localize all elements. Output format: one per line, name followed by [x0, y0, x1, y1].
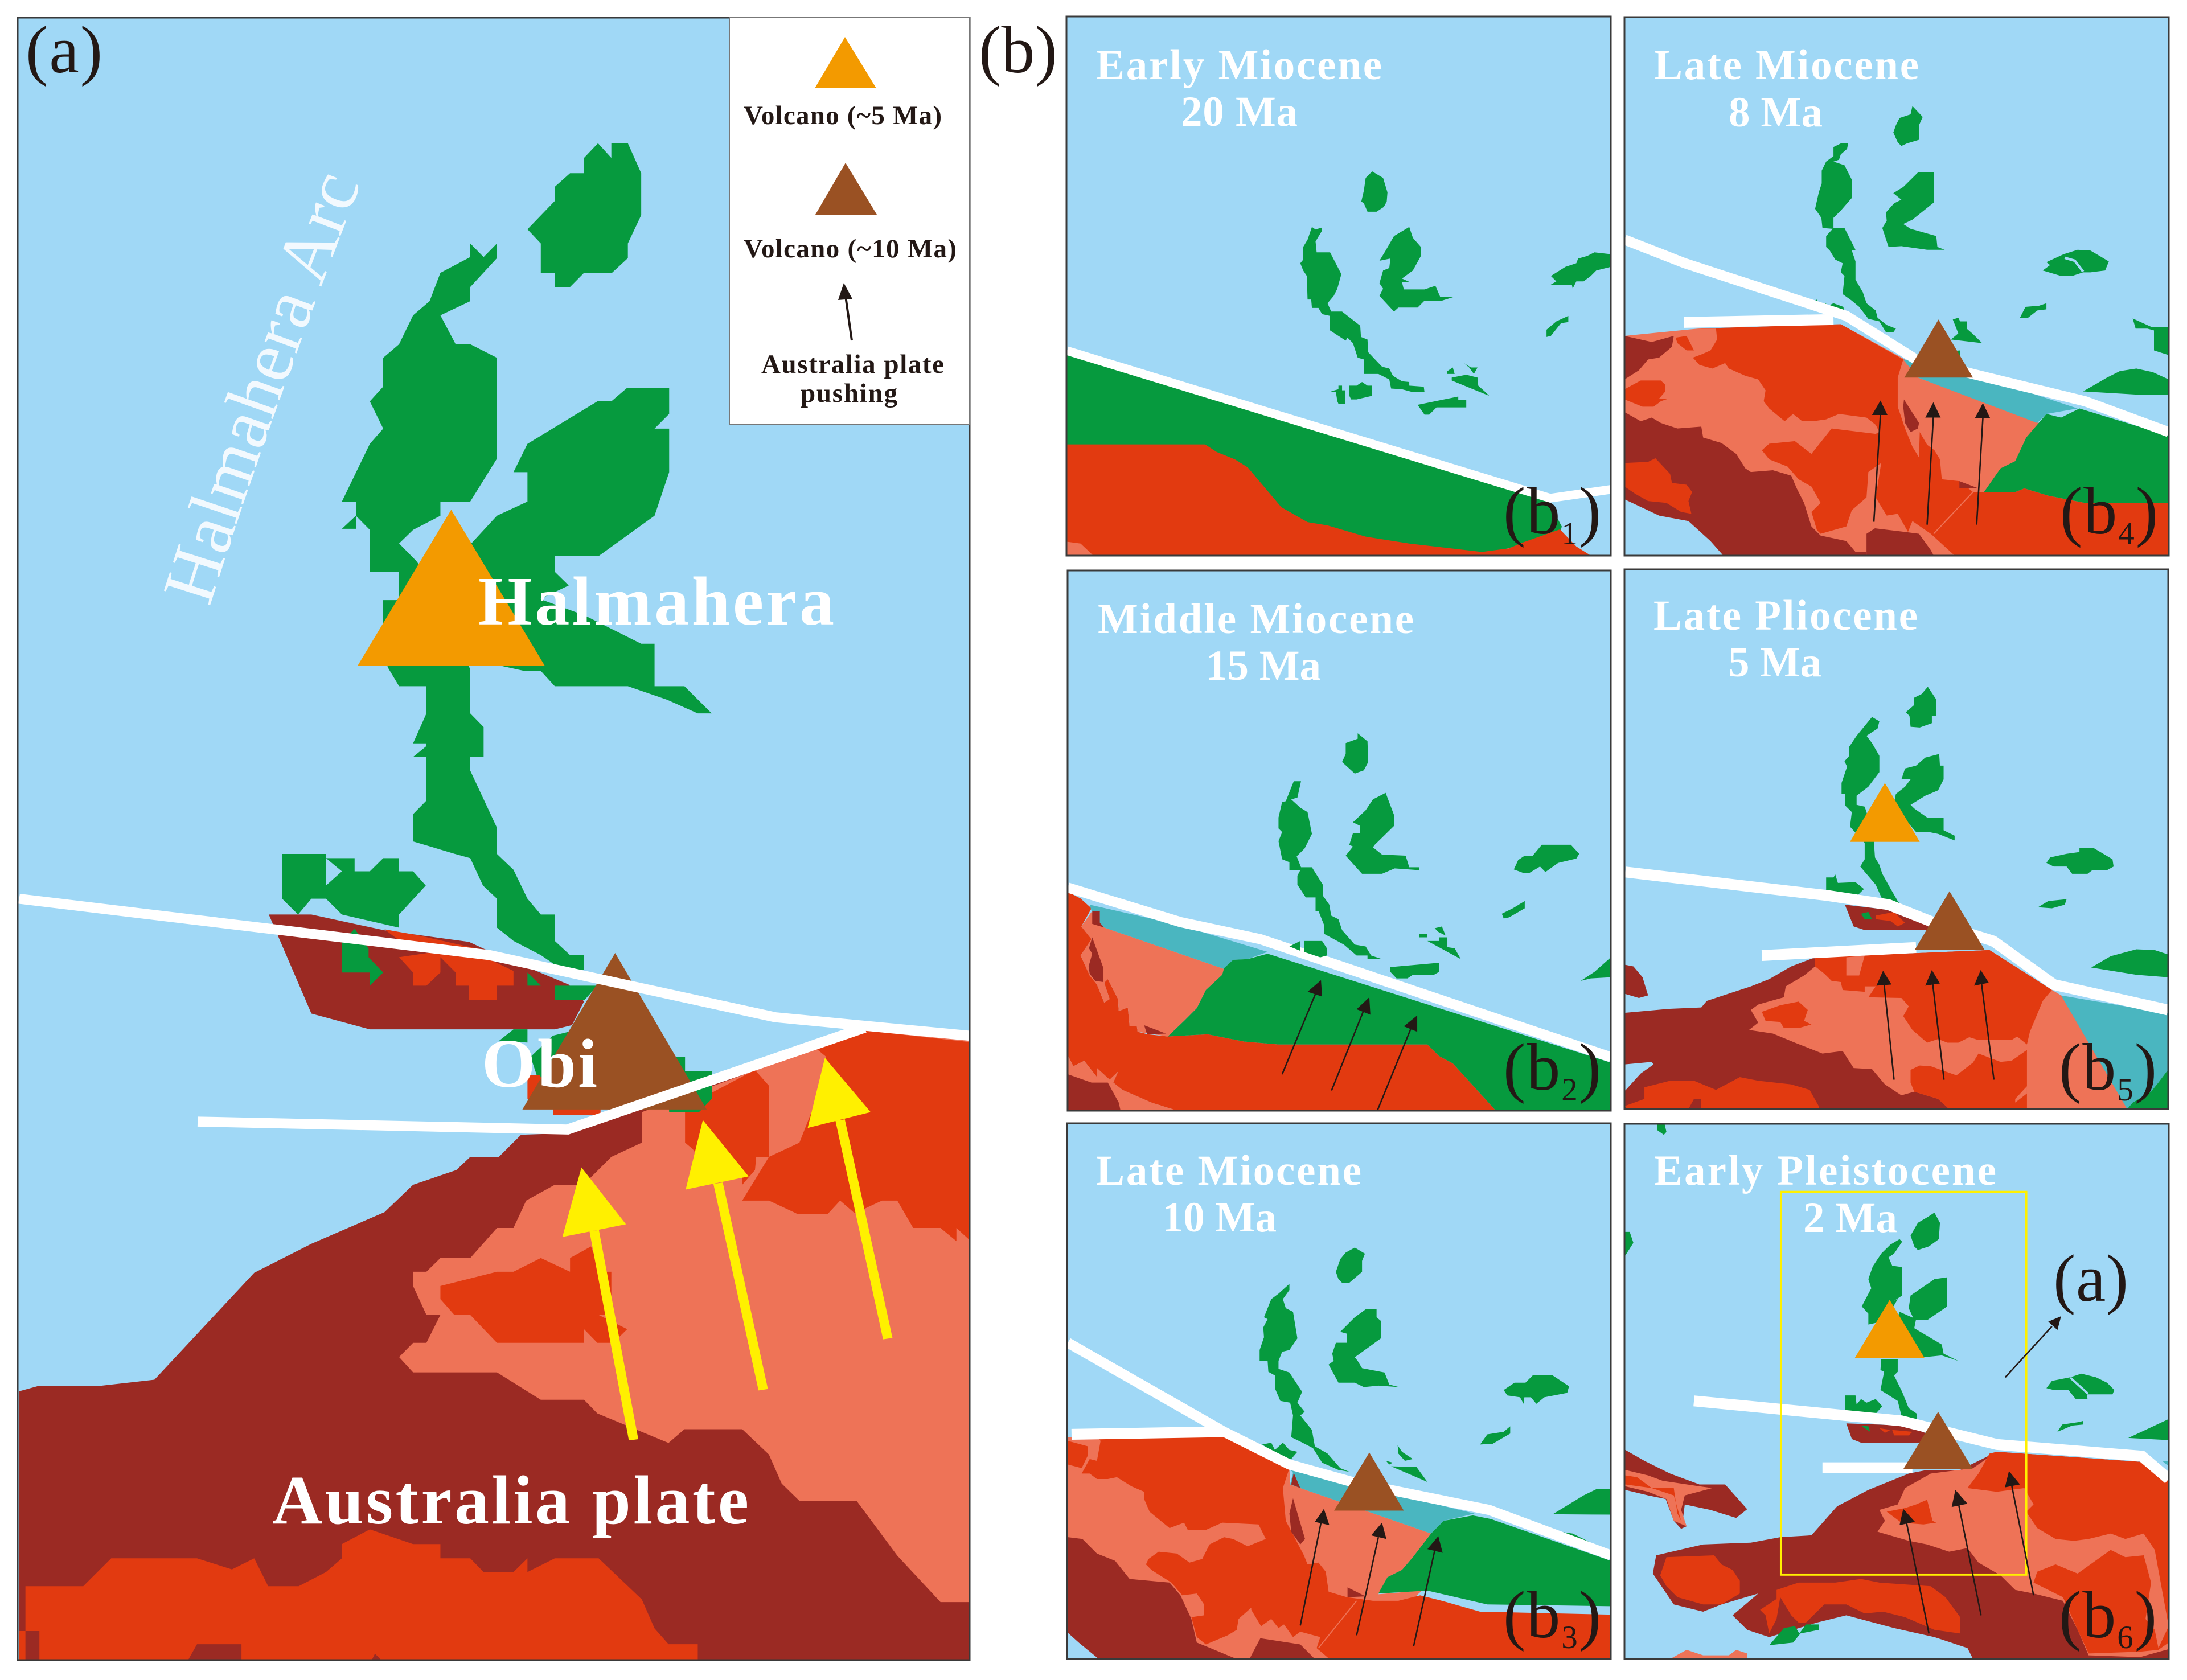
icon: orange volcano: [1855, 1300, 1925, 1358]
heading b1 age: 20 Ma: [1181, 88, 1298, 135]
arrow: to panel a: [2005, 1316, 2061, 1377]
label b3: (b: [1503, 1578, 1560, 1652]
map: b2: [1068, 570, 1611, 1111]
icon: orange volcano: [1850, 783, 1920, 842]
legend text: volcano 10 Ma: Volcano (~10 Ma): [744, 234, 957, 264]
arrow: yellow push 2: [686, 1120, 763, 1390]
label b2: 2: [1561, 1072, 1578, 1108]
trench line: upper: [19, 899, 969, 1036]
label: (a): (a): [26, 13, 102, 87]
label b6: 6: [2117, 1620, 2133, 1656]
label b3: ): [1579, 1578, 1601, 1652]
frame b1: [1066, 17, 1611, 556]
icon: brown volcano on Obi: [522, 953, 707, 1110]
trench line: lower: [198, 1028, 864, 1129]
frame b5: [1624, 569, 2168, 1109]
frame b2: [1068, 570, 1611, 1111]
label b3: 3: [1561, 1620, 1578, 1656]
heading b4: Late Miocene: [1654, 42, 1919, 89]
legend icon: brown volcano: [815, 163, 877, 215]
map: b3: [1067, 1123, 1611, 1659]
label b4: ): [2136, 474, 2158, 548]
icon: brown volcano: [1915, 892, 1985, 950]
heading b6: Early Pleistocene: [1654, 1147, 1996, 1194]
map: b1: [1066, 17, 1611, 556]
heading b4 age: 8 Ma: [1729, 89, 1823, 136]
heading b3 age: 10 Ma: [1162, 1194, 1277, 1241]
panel: b6 Early Pleistocene: [1624, 1124, 2169, 1659]
heading b3: Late Miocene: [1096, 1147, 1361, 1194]
label b2: (b: [1503, 1030, 1560, 1104]
legend text: Australia plate: Australia plate: [761, 350, 944, 379]
arrow: yellow push 1: [563, 1168, 634, 1440]
arrows: plate push: [1899, 1471, 2034, 1633]
panel: b4 Late Miocene 8 Ma: [1624, 17, 2169, 556]
label: Halmahera: Halmahera: [478, 563, 834, 640]
label b5: ): [2135, 1030, 2157, 1104]
label b4: (b: [2060, 474, 2117, 548]
arrows: plate push: [1872, 400, 1990, 525]
label b4: 4: [2118, 516, 2135, 552]
panel: b5 Late Pliocene: [1624, 569, 2168, 1109]
label: Australia plate: Australia plate: [272, 1462, 749, 1539]
icon: orange volcano on Halmahera: [358, 510, 544, 666]
icon: brown volcano: [1903, 1412, 1973, 1469]
panel: b1 Early Miocene: [1066, 17, 1611, 556]
label b1: (b: [1503, 474, 1560, 548]
heading b5: Late Pliocene: [1653, 592, 1918, 639]
icon: brown volcano: [1905, 319, 1973, 377]
box: extent of panel a: [1781, 1192, 2026, 1575]
heading b2: Middle Miocene: [1098, 595, 1414, 643]
arrows: plate push: [1282, 980, 1417, 1110]
panel: b2 Middle Miocene: [1068, 570, 1611, 1111]
label b1: ): [1579, 474, 1601, 548]
label: reference (a): (a): [2053, 1241, 2128, 1316]
panel: (a) Halmahera Arc map: [17, 13, 970, 1661]
panel frame: [18, 18, 970, 1660]
heading b1: Early Miocene: [1096, 42, 1382, 89]
map: b6: [1624, 1124, 2169, 1659]
legend: [729, 18, 970, 424]
label b6: (b: [2059, 1578, 2116, 1652]
map: b5: [1624, 569, 2168, 1109]
arrow: yellow push 3: [808, 1058, 888, 1338]
heading b5 age: 5 Ma: [1728, 639, 1821, 686]
label: (b): (b): [979, 13, 1057, 87]
label b5: (b: [2059, 1030, 2116, 1104]
panel: b3 Late Miocene 10 Ma: [1067, 1123, 1611, 1659]
legend text: pushing: pushing: [801, 379, 897, 408]
frame b6: [1624, 1124, 2169, 1659]
map: b4: [1624, 17, 2169, 556]
label: Halmahera Arc curved: Halmahera Arc: [164, 174, 359, 606]
heading b2 age: 15 Ma: [1206, 642, 1321, 689]
frame b3: [1067, 1123, 1611, 1659]
label b1: 1: [1561, 516, 1578, 552]
frame b4: [1624, 17, 2169, 556]
label: Obi: Obi: [482, 1025, 597, 1102]
label b6: ): [2135, 1578, 2157, 1652]
label b2: ): [1579, 1030, 1601, 1104]
heading b6 age: 2 Ma: [1803, 1194, 1897, 1242]
arrows: plate push: [1300, 1509, 1443, 1646]
map: Obi and Australia plate: [19, 854, 969, 1660]
legend arrow: plate pushing: [838, 283, 852, 340]
map: Halmahera islands: [342, 143, 712, 854]
legend icon: orange volcano: [815, 37, 876, 88]
arrows: plate push: [1877, 970, 1994, 1080]
icon: brown volcano: [1334, 1452, 1404, 1511]
legend text: volcano 5 Ma: Volcano (~5 Ma): [744, 101, 942, 130]
label b5: 5: [2117, 1072, 2133, 1108]
